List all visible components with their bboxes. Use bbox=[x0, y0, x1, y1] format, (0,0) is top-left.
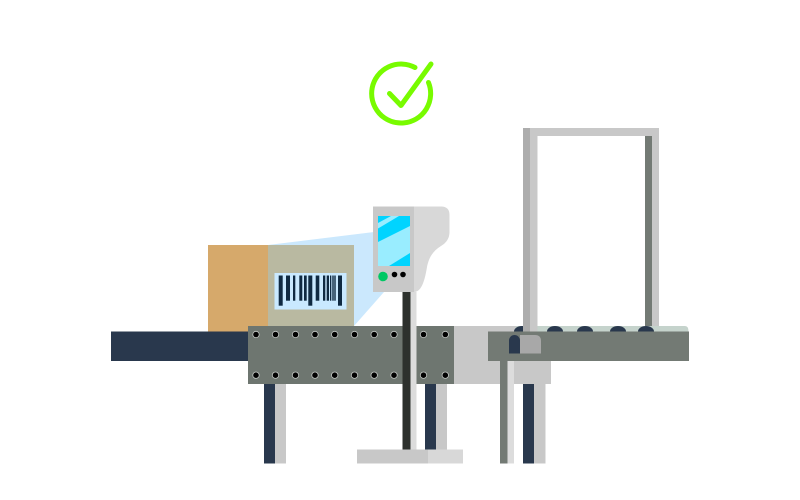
left conveyor belt bbox=[111, 332, 251, 361]
conveyor support body bbox=[454, 326, 551, 384]
barcode label bbox=[274, 273, 346, 310]
scanner buttons bbox=[378, 272, 406, 281]
gate left pillar front bbox=[523, 310, 538, 332]
cardboard box bbox=[208, 245, 354, 332]
handheld scanner bbox=[373, 206, 450, 292]
main conveyor housing with rivets bbox=[248, 326, 454, 384]
conveyor hatch bbox=[509, 335, 541, 354]
right conveyor housing bbox=[488, 332, 689, 361]
icon: green check mark bbox=[372, 64, 431, 123]
right conveyor rollers bbox=[514, 326, 688, 332]
scanner stand base bbox=[357, 450, 463, 464]
gate frame bbox=[523, 128, 659, 331]
conveyor legs bbox=[264, 361, 546, 464]
scanner pole bbox=[402, 292, 416, 450]
scanner screen bbox=[378, 216, 410, 266]
scanner light beam bbox=[268, 232, 384, 326]
